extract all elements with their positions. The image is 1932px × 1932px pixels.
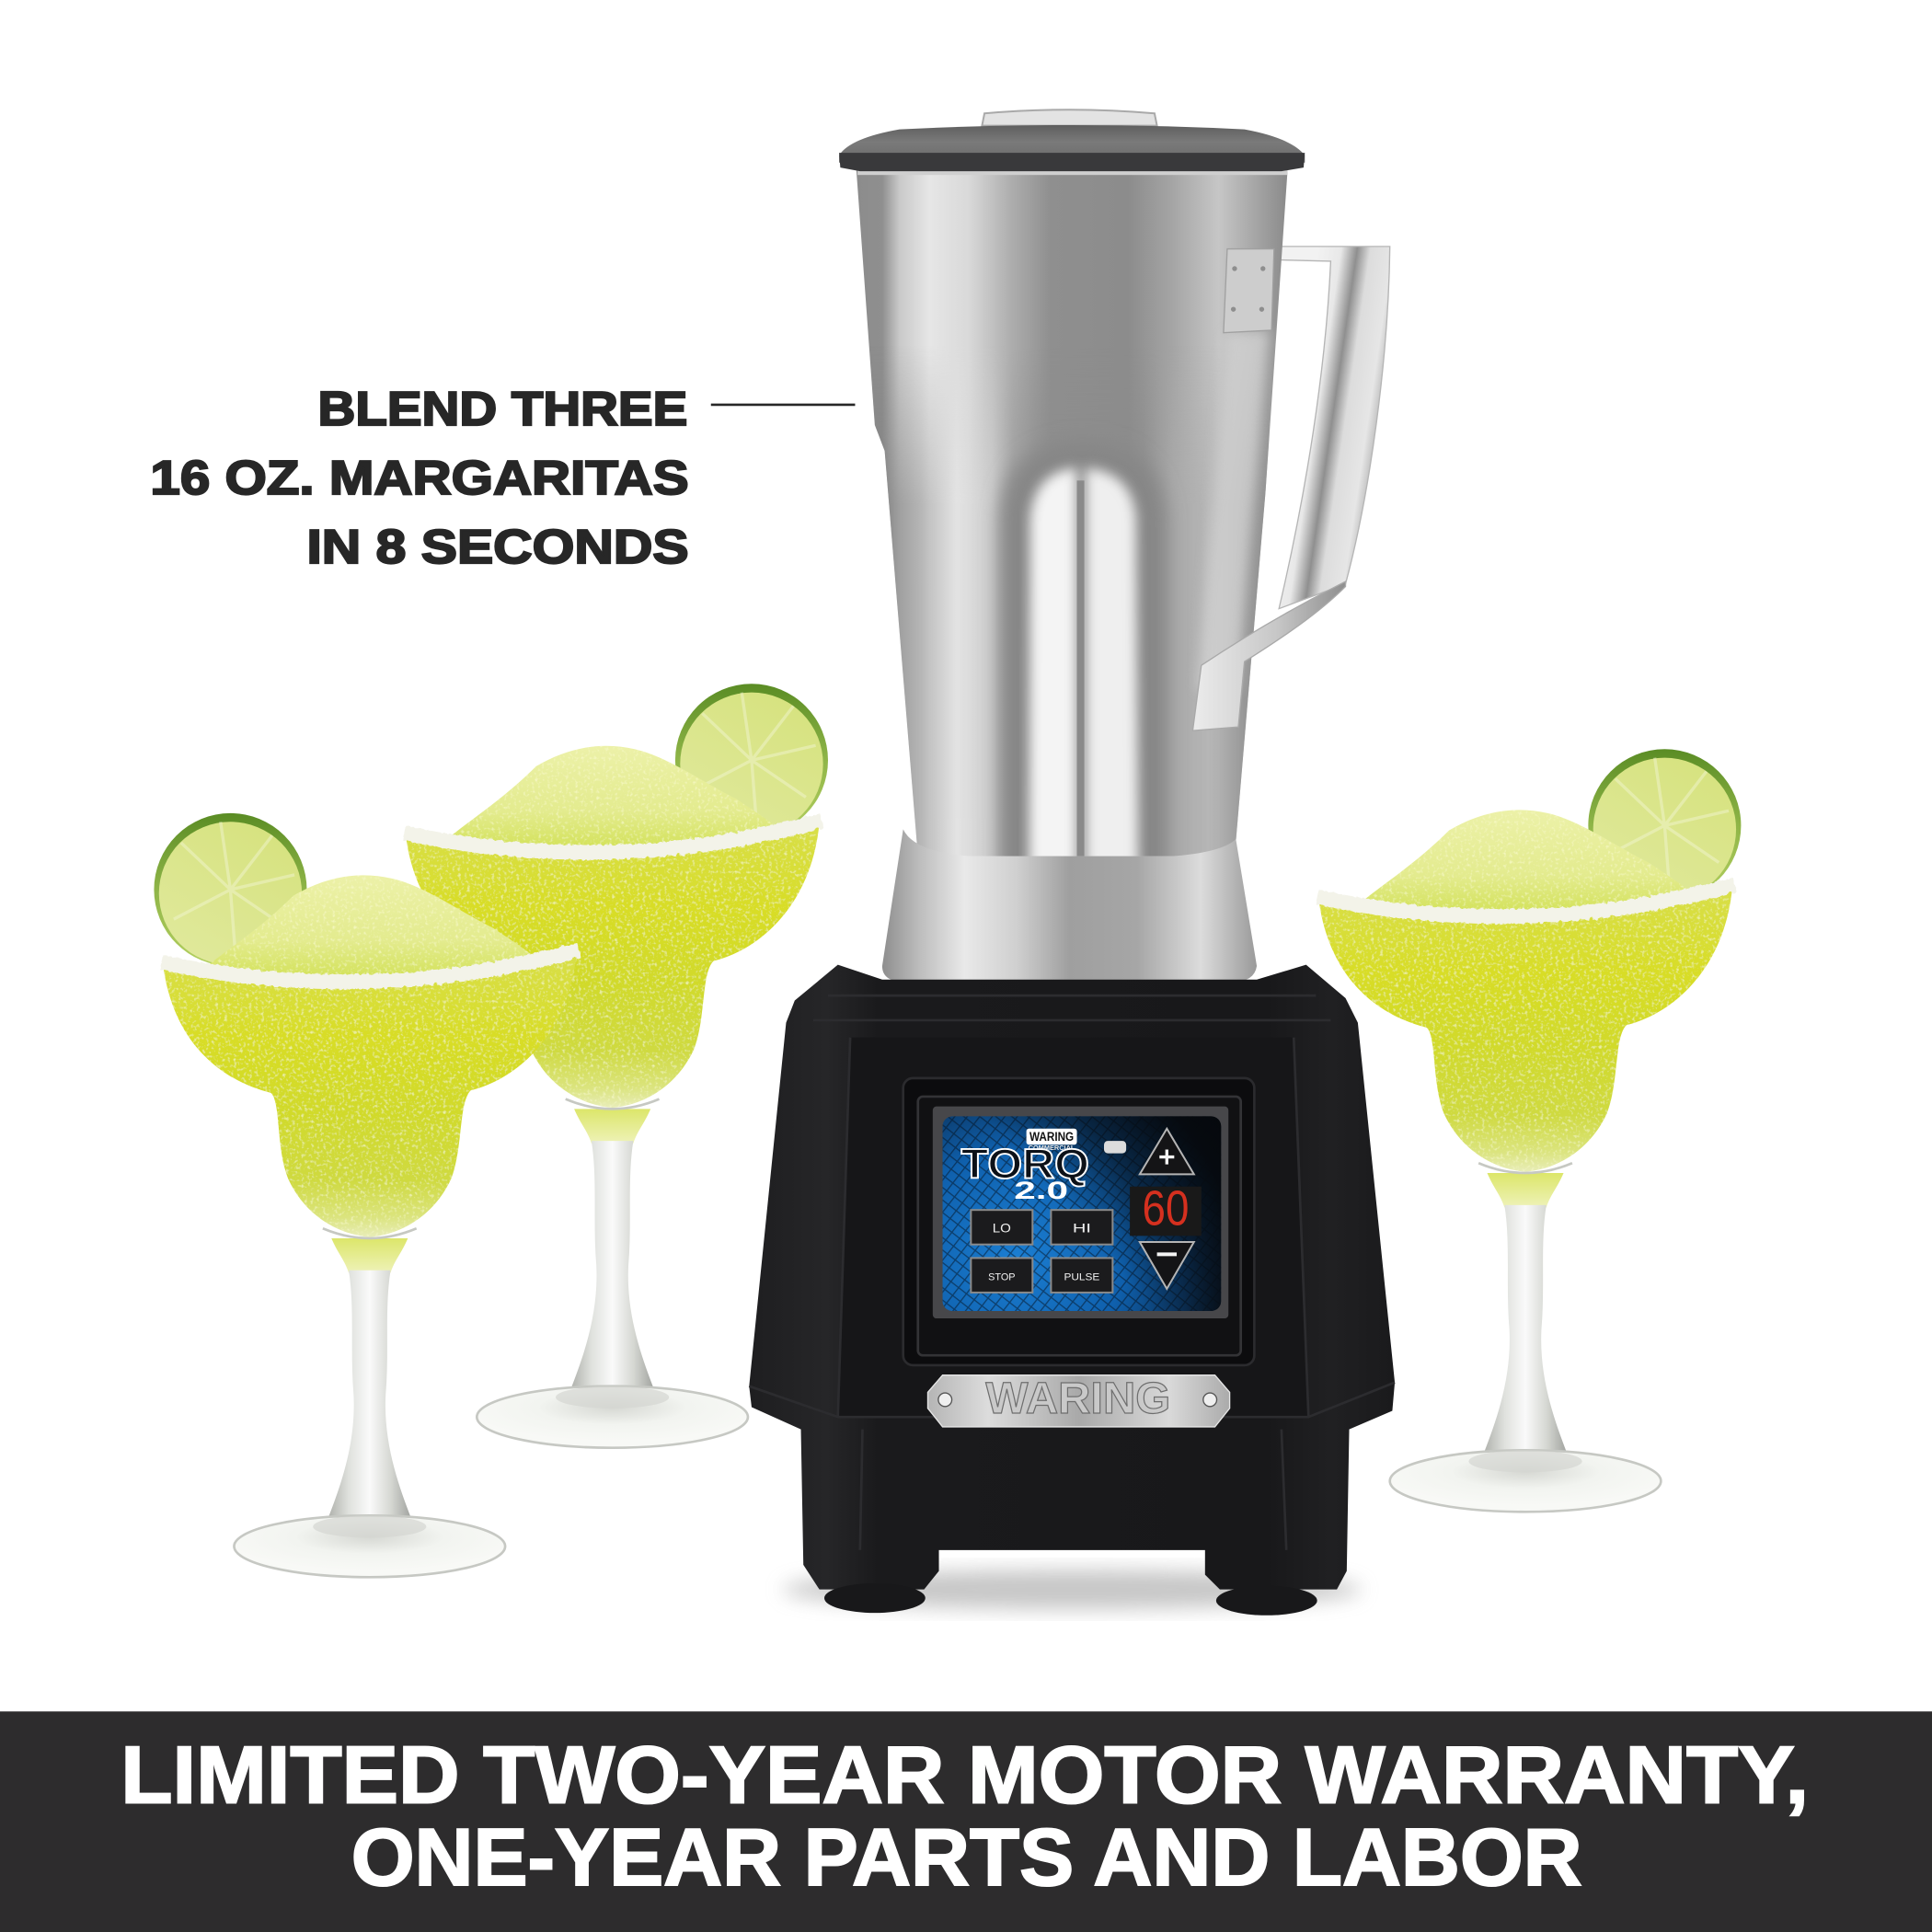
callout text xyxy=(150,383,689,574)
margarita glass: right xyxy=(1317,749,1741,1512)
panel bezel xyxy=(903,1078,1254,1365)
button: STOP xyxy=(971,1258,1032,1293)
floor shadow xyxy=(782,1570,1362,1609)
blender xyxy=(749,109,1395,1616)
timer display: 60 xyxy=(1143,1181,1189,1236)
callout leader line xyxy=(711,404,855,406)
banner text: ONE-YEAR PARTS AND LABOR xyxy=(351,1811,1582,1903)
lower handle arm and bracket xyxy=(1192,581,1345,730)
Torq logo: 2.0 xyxy=(1014,1177,1068,1204)
jar lid xyxy=(839,109,1305,171)
button: HI xyxy=(1051,1210,1112,1245)
button: PULSE: PULSE xyxy=(1064,1272,1099,1283)
minus arrow xyxy=(1140,1242,1194,1289)
Torq logo: WARING xyxy=(1029,1129,1074,1144)
button: PULSE xyxy=(1051,1258,1112,1293)
lime slice xyxy=(675,684,828,836)
indicator light xyxy=(1104,1141,1126,1154)
glass with slush xyxy=(161,875,579,1577)
margarita glass: front left xyxy=(154,813,579,1577)
jar handle xyxy=(1232,247,1390,609)
plus arrow xyxy=(1140,1129,1194,1174)
banner background xyxy=(0,1711,1932,1932)
button: LO: LO xyxy=(993,1220,1011,1235)
jar collar xyxy=(882,829,1257,982)
button: STOP: STOP xyxy=(988,1272,1016,1283)
foot left xyxy=(824,1583,926,1613)
callout text: BLEND THREE xyxy=(318,383,687,436)
Torq logo xyxy=(961,1129,1089,1204)
Torq logo: TORQ xyxy=(961,1140,1089,1187)
callout text: IN 8 SECONDS xyxy=(306,521,689,574)
upper handle bracket xyxy=(1224,249,1274,333)
lime slice xyxy=(1588,749,1741,902)
callout: blend three margaritas xyxy=(150,383,855,574)
callout text: 16 OZ. MARGARITAS xyxy=(150,452,689,505)
control panel xyxy=(903,1078,1254,1365)
Waring nameplate: WARING xyxy=(985,1374,1170,1423)
lime slice xyxy=(154,813,306,966)
foot right xyxy=(1216,1586,1317,1616)
glass with slush xyxy=(1317,810,1735,1512)
banner text: LIMITED TWO-YEAR MOTOR WARRANTY, xyxy=(121,1729,1809,1820)
button: HI: HI xyxy=(1073,1220,1091,1235)
Torq logo: COMMERCIAL xyxy=(1029,1144,1075,1152)
blue touch screen xyxy=(943,1116,1221,1311)
button: LO xyxy=(971,1210,1032,1245)
margarita glass: back centre xyxy=(404,684,828,1448)
stainless jar xyxy=(850,170,1345,887)
motor base xyxy=(749,965,1395,1616)
banner text xyxy=(121,1729,1809,1903)
warranty banner xyxy=(0,1711,1932,1932)
Waring nameplate xyxy=(927,1374,1230,1427)
glass with slush xyxy=(404,746,822,1448)
